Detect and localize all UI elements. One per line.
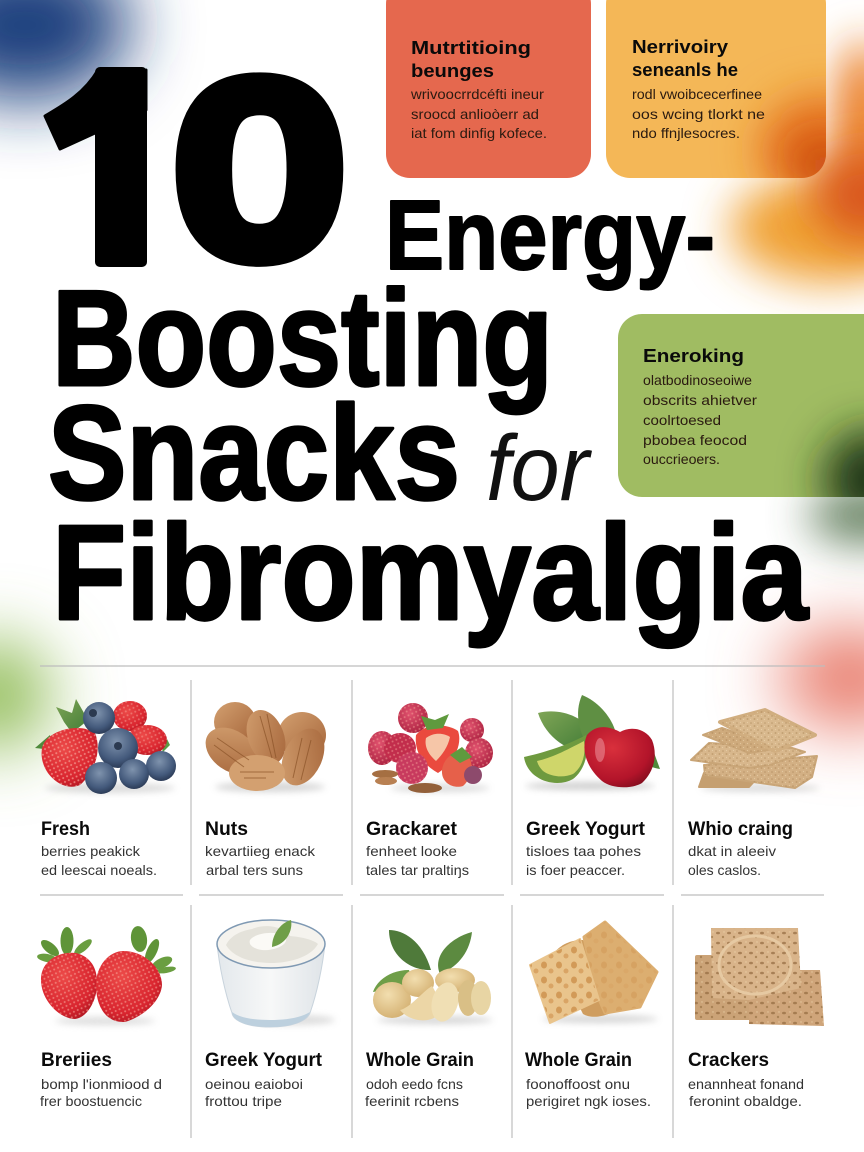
snack cell: whole grain crackers xyxy=(525,922,658,1109)
heading: Nuts xyxy=(205,819,248,840)
icon: cashews and leaves xyxy=(373,930,493,1025)
icon: yogurt glass xyxy=(217,920,335,1027)
heading: Greek Yogurt xyxy=(205,1050,323,1071)
card: energy (green): olatbodinoseoiwe xyxy=(643,372,752,388)
card: nutritional benefits (red): wrivoocrrdcéfti ineur xyxy=(410,86,544,102)
card: energy (green) xyxy=(618,314,864,497)
description xyxy=(205,843,316,878)
description xyxy=(688,843,776,878)
description: tales tar praltiŋs xyxy=(366,862,469,878)
description: feronint obaldge. xyxy=(689,1093,802,1109)
card: energy (green): obscrits ahietver xyxy=(643,392,757,408)
heading: Whole Grain xyxy=(525,1050,632,1071)
snack cell: crackers xyxy=(688,928,824,1109)
description: bomp l'ionmiood d xyxy=(41,1076,162,1092)
snack cell: nuts xyxy=(197,702,333,878)
heading: Grackaret xyxy=(366,819,458,840)
card: nervous system (yellow): seneanls he xyxy=(632,60,738,80)
description: ed leescai noeals. xyxy=(41,862,157,878)
snack cell: whole grain nuts xyxy=(365,930,493,1109)
heading: Whio craing xyxy=(688,819,793,840)
description xyxy=(41,843,157,878)
icon: two strawberries xyxy=(36,925,176,1025)
heading: Greek Yogurt xyxy=(526,819,646,840)
description: is foer peaccer. xyxy=(526,862,625,878)
description: odoh eedo fcns xyxy=(366,1076,463,1092)
description: enannheat fonand xyxy=(688,1076,804,1092)
description: perigiret ngk ioses. xyxy=(526,1093,651,1109)
card: nervous system (yellow): rodl vwoibcecerfinee xyxy=(632,86,762,102)
icon: two golden crackers xyxy=(530,922,658,1023)
description: foonoffoost onu xyxy=(526,1076,630,1092)
card: nervous system (yellow): oos wcing tlorkt ne xyxy=(632,106,765,122)
title: Snacks xyxy=(48,379,460,528)
icon: square crackers xyxy=(695,928,824,1026)
description: fenheet looke xyxy=(366,843,457,859)
description: feerinit rcbens xyxy=(365,1093,459,1109)
title: for xyxy=(486,416,593,520)
card: nutritional benefits (red): sroocd anlioòerr ad xyxy=(411,106,539,122)
big number 10 xyxy=(44,67,344,267)
description xyxy=(205,1076,303,1109)
snack cell: fresh berries xyxy=(35,699,176,878)
icon: apple, lime and leaves xyxy=(524,695,660,790)
snack cell: graham cracker and berries xyxy=(366,703,493,878)
heading: Fresh xyxy=(41,819,90,840)
description: berries peakick xyxy=(41,843,141,859)
card: nutritional benefits (red): Mutrtitioing xyxy=(411,38,531,58)
description xyxy=(40,1076,162,1109)
snack cell: greek yogurt with fruit xyxy=(524,695,660,878)
description: tisloes taa pohes xyxy=(526,843,641,859)
title: Energy- xyxy=(385,180,715,290)
description: kevartiieg enack xyxy=(205,843,316,859)
card: nervous system (yellow): ndo ffnjlesocres. xyxy=(632,125,740,141)
description: frer boostuencic xyxy=(40,1093,142,1109)
grid dividers xyxy=(40,666,825,1138)
icon: raspberries and strawberry xyxy=(368,703,493,793)
card: nervous system (yellow): Nerrivoiry xyxy=(632,37,728,57)
icon: cracker stack xyxy=(691,710,820,792)
description: arbal ters suns xyxy=(206,862,303,878)
card: nutritional benefits (red) xyxy=(386,0,591,178)
icon: mixed berries xyxy=(35,699,176,794)
card: energy (green): pbobea feocod xyxy=(643,432,747,448)
card: energy (green): Eneroking xyxy=(643,346,744,366)
title: Boosting xyxy=(52,262,553,414)
heading: Breriies xyxy=(41,1050,112,1071)
description xyxy=(365,1076,463,1109)
icon: almonds xyxy=(197,702,333,792)
description: oles caslos. xyxy=(688,862,761,878)
title xyxy=(37,17,809,648)
heading: Whole Grain xyxy=(366,1050,474,1071)
card: energy (green): coolrtoesed xyxy=(643,412,721,428)
description xyxy=(688,1076,804,1109)
snack cell: whole grain crackers stack xyxy=(688,710,820,878)
heading: Crackers xyxy=(688,1050,769,1071)
card: nervous system (yellow) xyxy=(606,0,826,178)
card: energy (green): ouccrieoers. xyxy=(643,451,720,467)
description xyxy=(366,843,469,878)
description: frottou tripe xyxy=(205,1093,282,1109)
snack cell: greek yogurt xyxy=(205,920,335,1109)
description xyxy=(526,1076,651,1109)
description xyxy=(526,843,641,878)
big number 10: 1 xyxy=(37,17,187,318)
card: nutritional benefits (red): beunges xyxy=(411,61,494,81)
description: oeinou eaioboi xyxy=(205,1076,303,1092)
description: dkat in aleeiv xyxy=(688,843,776,859)
card: nutritional benefits (red): iat fom dinfig kofece. xyxy=(411,125,547,141)
snack cell: berries xyxy=(36,925,176,1109)
big number 10: 0 xyxy=(180,36,339,302)
